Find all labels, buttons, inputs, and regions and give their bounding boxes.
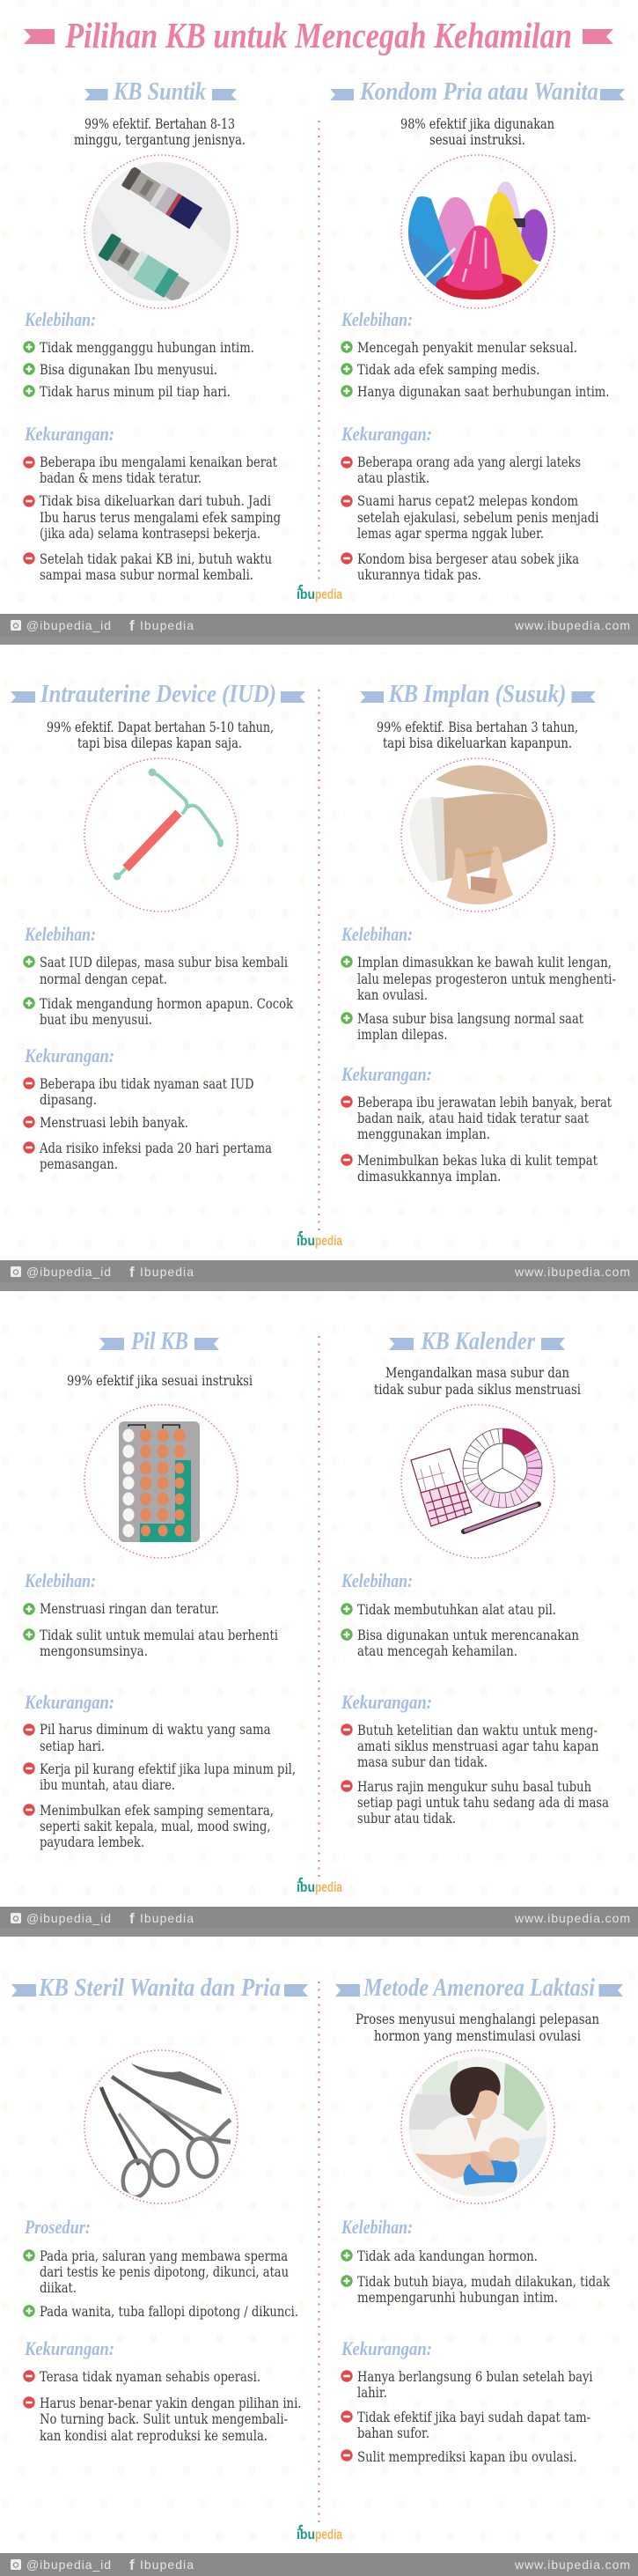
footer bar: www.ibupedia.com xyxy=(514,2558,630,2572)
subheading: Prosedur: Prosedur: xyxy=(24,2216,91,2238)
subheading: Kelebihan: Kelebihan: xyxy=(24,308,96,330)
list: Kekurangan xyxy=(341,1723,609,1827)
list: Kelebihan xyxy=(23,340,254,400)
description: 99% efektif jika sesuai instruksi xyxy=(67,1373,253,1389)
footer bar: @ibupedia_id xyxy=(26,2558,111,2572)
list: Kekurangan: payudara lembek. xyxy=(40,1834,144,1850)
subheading: Kekurangan: Kekurangan: xyxy=(24,1691,114,1713)
panel: KB Suntik xyxy=(23,78,281,583)
list: Kekurangan: atau plastik. xyxy=(357,470,429,486)
heading: KB Steril Wanita dan Pria: KB Steril Wanita dan Pria xyxy=(38,1974,281,2002)
list: Kelebihan: Tidak mengganggu hubungan intim. xyxy=(40,340,254,356)
description xyxy=(400,116,554,148)
footer bar: @ibupedia_id xyxy=(26,1265,111,1279)
list: Kekurangan: Beberapa ibu tidak nyaman saat IUD xyxy=(40,1076,253,1092)
heading: KB Suntik: KB Suntik xyxy=(113,78,206,106)
list: Kekurangan xyxy=(23,2369,302,2444)
list: Kekurangan xyxy=(341,1095,612,1185)
panel: Kondom xyxy=(330,78,625,583)
description: Mengandalkan masa subur dan xyxy=(385,1365,569,1381)
list: Kekurangan: Suami harus cepat2 melepas kondom xyxy=(357,493,578,509)
heading: KB Kalender: KB Kalender xyxy=(421,1327,536,1355)
list: Kekurangan: pemasangan. xyxy=(40,1156,118,1172)
photo: arm with implant xyxy=(401,758,554,912)
logo: ibu xyxy=(297,2528,315,2543)
list: Kekurangan: No turning back. Sulit untuk mengembali- xyxy=(40,2411,288,2427)
subheading: Kekurangan: Kekurangan: xyxy=(341,1691,432,1713)
list: Kekurangan: badan & mens tidak teratur. xyxy=(40,470,202,486)
list: Kekurangan: badan naik, atau haid tidak teratur saat xyxy=(357,1111,590,1126)
logo: ibu xyxy=(297,1234,315,1249)
list: Kelebihan: Tidak harus minum pil tiap hari. xyxy=(40,384,231,400)
logo: pedia xyxy=(315,1880,342,1895)
panel: Metode Amenorea Laktasi xyxy=(335,1974,623,2465)
list: Kekurangan xyxy=(23,454,281,583)
logo: pedia xyxy=(315,1234,342,1249)
list: Kelebihan: Tidak ada efek samping medis. xyxy=(357,362,540,378)
description: tidak subur pada siklus menstruasi xyxy=(374,1382,581,1398)
photo: condoms xyxy=(401,155,554,308)
list: Kekurangan: Kondom bisa bergeser atau sobek jika xyxy=(357,551,579,567)
list: Kekurangan: Ada risiko infeksi pada 20 hari pertama xyxy=(39,1140,272,1156)
list: Kekurangan: masa subur dan tidak. xyxy=(357,1754,488,1770)
list: Kelebihan: Bisa digunakan untuk merencanakan xyxy=(357,1628,579,1643)
list: Kekurangan: Harus rajin mengukur suhu basal tubuh xyxy=(357,1779,591,1795)
list: Kekurangan: lemas agar sperma nggak luber. xyxy=(357,526,544,542)
subheading: Kelebihan: Kelebihan: xyxy=(341,1569,413,1591)
logo: ibu xyxy=(297,587,315,602)
list: Kelebihan: Saat IUD dilepas, masa subur bisa kembali xyxy=(40,955,288,971)
list: Kekurangan: Sulit memprediksi kapan ibu ovulasi. xyxy=(357,2449,577,2465)
description: 99% efektif. Bertahan 8-13 xyxy=(84,116,235,132)
footer bar xyxy=(0,2553,638,2576)
list: Kelebihan: mengonsumsinya. xyxy=(40,1643,148,1659)
list: Kelebihan: Menstruasi ringan dan teratur. xyxy=(40,1601,219,1617)
list: Kelebihan: Tidak ada kandungan hormon. xyxy=(357,2248,538,2264)
subheading: Kelebihan: Kelebihan: xyxy=(24,1569,96,1591)
description xyxy=(377,720,578,751)
list: Kelebihan: Masa subur bisa langsung normal saat xyxy=(357,1011,584,1027)
list: Kekurangan: Menimbulkan bekas luka di kulit tempat xyxy=(357,1153,598,1169)
list: Kelebihan: buat ibu menyusui. xyxy=(40,1012,152,1028)
description xyxy=(47,720,274,751)
heading: Kondom Pria atau Wanita: Kondom Pria atau Wanita xyxy=(359,78,598,106)
list: Kekurangan: Beberapa orang ada yang alergi lateks xyxy=(357,454,581,470)
list: Kelebihan: Tidak membutuhkan alat atau pil. xyxy=(357,1602,556,1618)
logo: pedia xyxy=(315,587,342,602)
description: tapi bisa dikeluarkan kapanpun. xyxy=(383,735,572,751)
list: Kekurangan: Kerja pil kurang efektif jika lupa minum pil, xyxy=(40,1761,296,1777)
list: Prosedur xyxy=(23,2248,298,2320)
list: Kelebihan xyxy=(341,955,616,1043)
list: Kekurangan: Menstruasi lebih banyak. xyxy=(40,1115,188,1131)
description: Proses menyusui menghalangi pelepasan xyxy=(356,2011,599,2027)
list: Kekurangan: Tidak efektif jika bayi sudah dapat tam- xyxy=(357,2410,590,2425)
list: Kekurangan: dimasukkannya implan. xyxy=(357,1169,502,1185)
photo: pill pack xyxy=(84,1405,238,1558)
list: Kekurangan: lahir. xyxy=(357,2385,387,2401)
list: Kelebihan: atau mencegah kehamilan. xyxy=(357,1643,517,1659)
list: Kekurangan: seperti sakit kepala, mual, mood swing, xyxy=(40,1819,271,1834)
list: Kelebihan xyxy=(23,955,294,1028)
description: minggu, tergantung jenisnya. xyxy=(74,132,246,148)
list: Kekurangan: kan kondisi alat reproduksi ke semula. xyxy=(40,2428,268,2444)
list: Kelebihan: Bisa digunakan Ibu menyusui. xyxy=(40,362,217,378)
description xyxy=(74,116,246,148)
list: Kekurangan: amati siklus menstruasi agar tahu kapan xyxy=(357,1738,599,1754)
list: Kelebihan xyxy=(341,340,609,400)
list: Kelebihan: Tidak mengandung hormon apapun. Cocok xyxy=(40,996,294,1012)
footer bar: Ibupedia xyxy=(140,2558,194,2572)
list: Kekurangan: sampai masa subur normal kembali. xyxy=(40,567,253,583)
logo: ibu xyxy=(297,1880,315,1895)
list: Kekurangan: Menimbulkan efek samping sementara, xyxy=(40,1803,274,1819)
list: Kekurangan xyxy=(341,2369,593,2465)
subheading: Kekurangan: Kekurangan: xyxy=(341,423,432,445)
subheading: Kelebihan: Kelebihan: xyxy=(341,308,413,330)
list: Kekurangan xyxy=(23,1076,272,1172)
subheading: Kekurangan: Kekurangan: xyxy=(341,1063,432,1085)
list: Kelebihan: Tidak sulit untuk memulai atau berhenti xyxy=(40,1628,278,1643)
list: Kekurangan: Hanya berlangsung 6 bulan setelah bayi xyxy=(357,2369,593,2385)
heading: Intrauterine Device (IUD): Intrauterine Device (IUD) xyxy=(40,680,276,708)
list: Kekurangan: Terasa tidak nyaman sehabis operasi. xyxy=(40,2369,260,2385)
list: Kelebihan: kan ovulasi. xyxy=(357,987,428,1003)
description: 98% efektif jika digunakan xyxy=(400,116,554,132)
subheading: Kekurangan: Kekurangan: xyxy=(24,2337,114,2359)
footer bar: f xyxy=(129,1264,135,1281)
footer bar xyxy=(0,1260,638,1291)
panel: IUD xyxy=(11,680,305,1172)
illustration: IUD device xyxy=(84,758,238,912)
description: tapi bisa dilepas kapan saja. xyxy=(77,735,242,751)
description xyxy=(374,1365,581,1398)
list: Kekurangan: ukurannya tidak pas. xyxy=(357,567,481,583)
list: Kekurangan: bahan sufor. xyxy=(357,2425,429,2441)
footer bar: @ibupedia_id xyxy=(26,1911,111,1925)
subheading: Kekurangan: Kekurangan: xyxy=(341,2337,432,2359)
list: Kekurangan xyxy=(23,1722,296,1850)
subheading: Kelebihan: Kelebihan: xyxy=(341,923,413,945)
footer bar: www.ibupedia.com xyxy=(514,618,630,632)
list: Kekurangan: Pil harus diminum di waktu yang sama xyxy=(40,1722,271,1738)
list: Kekurangan: menggunakan implan. xyxy=(357,1126,490,1142)
list: Kekurangan: Beberapa ibu mengalami kenaikan berat xyxy=(40,454,278,470)
logo xyxy=(297,1232,342,1249)
description: 99% efektif. Dapat bertahan 5-10 tahun, xyxy=(47,720,274,735)
photo: mother breastfeeding xyxy=(401,2050,554,2203)
description: hormon yang menstimulasi ovulasi xyxy=(374,2028,581,2044)
logo xyxy=(297,2526,342,2543)
footer bar: f xyxy=(129,617,135,634)
list: Prosedur: Pada wanita, tuba fallopi dipotong / dikunci. xyxy=(40,2304,298,2320)
panel: KB Steril xyxy=(11,1974,308,2444)
list: Kelebihan: normal dengan cepat. xyxy=(40,971,167,987)
list: Kekurangan xyxy=(341,454,599,583)
photo: injection vials xyxy=(84,155,238,308)
logo: pedia xyxy=(315,2528,342,2543)
footer bar xyxy=(0,1907,638,1937)
list: Kekurangan: Setelah tidak pakai KB ini, butuh waktu xyxy=(40,551,272,567)
heading: Pil KB xyxy=(99,1327,219,1355)
list: Kelebihan xyxy=(341,1602,579,1659)
list: Kekurangan: Butuh ketelitian dan waktu untuk meng- xyxy=(357,1723,598,1738)
list: Kekurangan: ibu muntah, atau diare. xyxy=(40,1777,175,1793)
heading: Pil KB: Pil KB xyxy=(130,1327,188,1355)
footer bar: Ibupedia xyxy=(140,1265,194,1279)
footer bar: f xyxy=(129,1910,135,1927)
description: sesuai instruksi. xyxy=(429,132,525,148)
list: Prosedur: Pada pria, saluran yang membawa sperma xyxy=(40,2248,288,2264)
description xyxy=(356,2011,599,2044)
list: Prosedur: dari testis ke penis dipotong, dikunci, atau xyxy=(40,2264,289,2280)
list: Kekurangan: setiap hari. xyxy=(40,1738,105,1754)
footer bar: Ibupedia xyxy=(140,618,194,632)
heading: Metode Amenorea Laktasi: Metode Amenorea Laktasi xyxy=(363,1974,595,2002)
illustration: calendar, cycle wheel and thermometer xyxy=(401,1405,554,1558)
photo: surgical scissors xyxy=(84,2050,238,2203)
list: Kelebihan xyxy=(23,1601,278,1659)
list: Kekurangan: Harus benar-benar yakin dengan pilihan ini. xyxy=(40,2395,301,2411)
footer bar: Ibupedia xyxy=(140,1911,194,1925)
subheading: Kelebihan: Kelebihan: xyxy=(341,2216,413,2238)
footer bar: www.ibupedia.com xyxy=(514,1911,630,1925)
list: Kelebihan: mempengarunhi hubungan intim. xyxy=(357,2290,558,2306)
logo xyxy=(297,586,342,602)
list: Kekurangan: setelah ejakulasi, sebelum penis menjadi xyxy=(357,510,599,526)
panel: KB Kalender xyxy=(341,1327,609,1827)
description: 99% efektif. Bisa bertahan 3 tahun, xyxy=(377,720,578,735)
list: Kekurangan: subur atau tidak. xyxy=(357,1811,456,1827)
subheading: Kelebihan: Kelebihan: xyxy=(24,923,96,945)
list: Prosedur: diikat. xyxy=(40,2280,77,2296)
subheading: Kekurangan: Kekurangan: xyxy=(24,1044,114,1067)
subheading: Kekurangan: Kekurangan: xyxy=(24,423,114,445)
list: Kekurangan: Ibu harus terus mengalami efek samping xyxy=(40,510,281,526)
list: Kelebihan xyxy=(341,2248,611,2306)
logo xyxy=(297,1878,342,1895)
footer bar: f xyxy=(129,2557,135,2573)
heading: KB Implan (Susuk): KB Implan (Susuk) xyxy=(388,680,567,708)
list: Kelebihan: Mencegah penyakit menular seksual. xyxy=(357,340,577,356)
list: Kekurangan: dipasang. xyxy=(40,1092,97,1108)
list: Kekurangan: Tidak bisa dikeluarkan dari tubuh. Jadi xyxy=(40,493,271,509)
panel: KB Implan xyxy=(341,680,616,1185)
list: Kekurangan: (jika ada) selama kontrasepsi bekerja. xyxy=(40,526,260,542)
footer bar xyxy=(0,614,638,645)
footer bar: www.ibupedia.com xyxy=(514,1265,630,1279)
list: Kelebihan: implan dilepas. xyxy=(357,1027,447,1043)
footer bar: @ibupedia_id xyxy=(26,618,111,632)
panel: Pil KB xyxy=(23,1327,296,1850)
